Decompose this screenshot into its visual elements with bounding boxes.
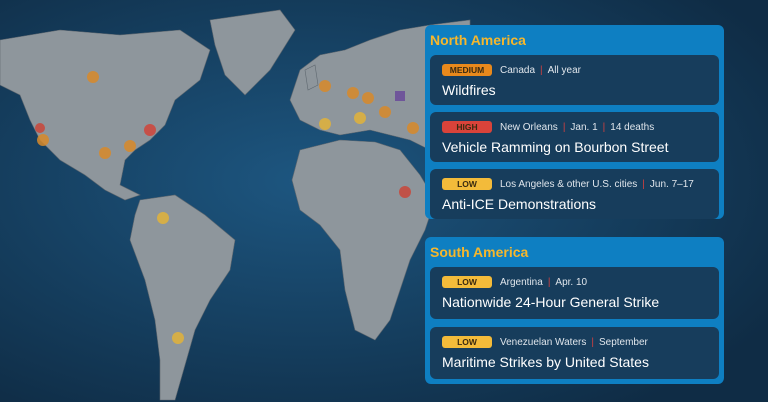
- card: vehicle ramming: [430, 112, 719, 162]
- card: general strike: LOW: [457, 277, 477, 287]
- greenland: [210, 10, 295, 95]
- card: anti-ICE: [430, 169, 719, 219]
- heading: North America: [430, 32, 526, 48]
- card: maritime strikes: |: [591, 336, 594, 348]
- europe/asia: [290, 20, 470, 150]
- card: anti-ICE: |: [642, 178, 645, 190]
- uk: [305, 65, 318, 90]
- heading: South America: [430, 244, 528, 260]
- card: vehicle ramming: |: [603, 122, 605, 132]
- card: general strike: |: [548, 276, 550, 288]
- card: vehicle ramming: |: [563, 122, 565, 132]
- card: wildfires: [430, 55, 719, 105]
- card: anti-ICE: LOW: [457, 179, 477, 189]
- panel: North America: [425, 25, 724, 219]
- card: wildfires: |: [540, 64, 543, 76]
- card: maritime strikes: Maritime Strikes by United States: [442, 354, 649, 370]
- card: wildfires: Canada All year: [500, 64, 581, 76]
- card: anti-ICE: Los Angeles & other U.S. cities Jun. 7–17: [500, 178, 694, 190]
- panel: South America: [425, 237, 724, 384]
- north america: [0, 30, 210, 200]
- card: vehicle ramming: New Orleans Jan. 1 14 deaths: [500, 122, 654, 132]
- card: maritime strikes: Venezuelan Waters September: [500, 336, 648, 348]
- africa: [292, 140, 435, 340]
- card: vehicle ramming: Vehicle Ramming on Bourbon Street: [442, 139, 668, 155]
- card: anti-ICE: Anti-ICE Demonstrations: [442, 196, 596, 212]
- card: maritime strikes: [430, 327, 719, 379]
- card: wildfires: MEDIUM: [450, 65, 484, 75]
- card: vehicle ramming: HIGH: [456, 122, 478, 132]
- card: general strike: Argentina Apr. 10: [500, 276, 587, 288]
- card: general strike: [430, 267, 719, 319]
- card: general strike: Nationwide 24-Hour General Strike: [442, 294, 659, 310]
- south america: [130, 195, 235, 400]
- card: wildfires: Wildfires: [442, 82, 496, 98]
- card: maritime strikes: LOW: [457, 337, 477, 347]
